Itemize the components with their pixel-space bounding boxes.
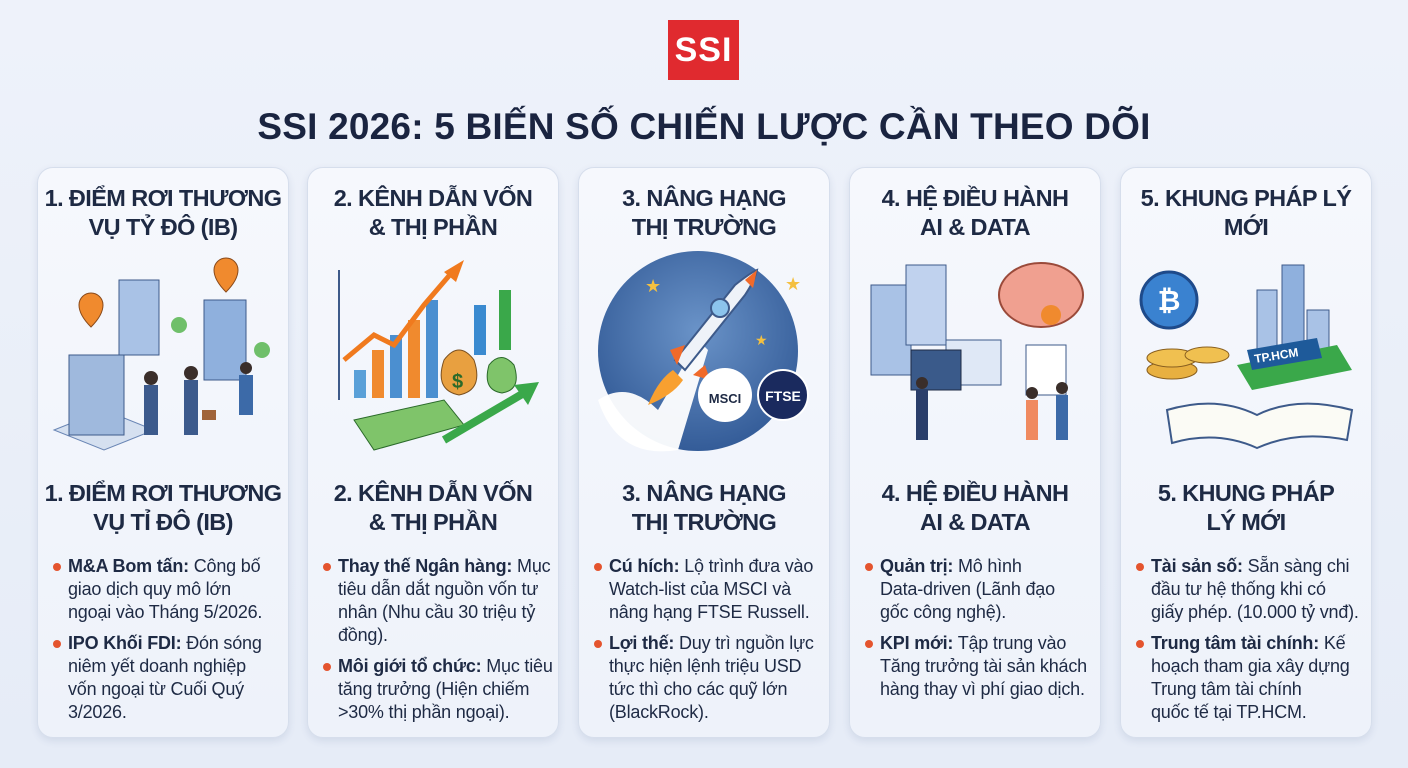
illustration: rocket: ★: [755, 332, 768, 348]
bullets card 1: [53, 556, 262, 722]
heading card 3 repeat: THỊ TRƯỜNG: [632, 509, 776, 535]
heading card 2: 2. KÊNH DẪN VỐN: [334, 185, 532, 211]
illustration: rocket: FTSE: [765, 388, 801, 404]
panel: card 5: [1120, 167, 1372, 738]
heading card 4 repeat: AI & DATA: [920, 509, 1030, 535]
bullets card 5: Trung tâm tài chính: Kế: [1151, 633, 1345, 653]
heading card 4: [882, 185, 1068, 240]
heading card 1 repeat: VỤ TỈ ĐÔ (IB): [93, 509, 233, 535]
heading card 2 repeat: [334, 480, 532, 535]
illustration: bitcoin, coins, city, book: TP.HCM: [1253, 345, 1299, 366]
bullets card 4: Quản trị: Mô hình: [880, 556, 1022, 576]
illustration: bitcoin, coins, city, book: [1140, 264, 1354, 450]
bullets card 3: [594, 556, 814, 722]
panel: card 1: [37, 167, 289, 738]
logo: [668, 20, 739, 80]
heading card 1 repeat: [45, 480, 281, 535]
bullets card 2: tiêu dẫn dắt nguồn vốn tư: [338, 579, 538, 599]
heading card 4: AI & DATA: [920, 214, 1030, 240]
bullets card 2: [323, 556, 553, 722]
panel: card 4: [849, 167, 1101, 738]
bullets card 1: M&A Bom tấn: Công bố: [68, 556, 260, 576]
heading card 3: [622, 185, 786, 240]
bullets card 4: Data-driven (Lãnh đạo: [880, 579, 1055, 599]
illustration: chart and money: [338, 260, 539, 451]
heading card 3: THỊ TRƯỜNG: [632, 214, 776, 240]
bullets card 3: Lợi thế: Duy trì nguồn lực: [609, 633, 814, 653]
bullets card 1: IPO Khối FDI: Đón sóng: [68, 633, 262, 653]
illustration: rocket: MSCI: [709, 391, 741, 406]
bullets card 4: Tăng trưởng tài sản khách: [880, 656, 1087, 676]
bullets card 4: KPI mới: Tập trung vào: [880, 633, 1066, 653]
illustration: rocket: ★: [645, 276, 661, 296]
heading card 3: 3. NÂNG HẠNG: [622, 185, 786, 211]
bullets card 3: Watch-list của MSCI và: [609, 579, 791, 599]
heading card 4 repeat: 4. HỆ ĐIỀU HÀNH: [882, 480, 1068, 506]
heading card 5 repeat: [1158, 480, 1334, 535]
bullets card 5: [1136, 556, 1359, 722]
logo: SSI: [675, 31, 732, 69]
bullets card 5: Trung tâm tài chính: [1151, 679, 1302, 699]
heading card 2 repeat: & THỊ PHẦN: [369, 509, 497, 535]
bullets card 3: tức thì cho các quỹ lớn: [609, 679, 787, 699]
heading card 2: [334, 185, 532, 240]
bullets card 2: đồng).: [338, 625, 388, 645]
heading card 4 repeat: [882, 480, 1068, 535]
bullets card 1: ngoại vào Tháng 5/2026.: [68, 602, 262, 622]
bullets card 5: hoạch tham gia xây dựng: [1151, 656, 1350, 676]
bullets card 2: >30% thị phần ngoại).: [338, 702, 509, 722]
bullets card 1: 3/2026.: [68, 702, 127, 722]
panel: card 2: [307, 167, 559, 738]
bullets card 3: (BlackRock).: [609, 702, 709, 722]
bullets card 2: Môi giới tổ chức: Mục tiêu: [338, 656, 553, 676]
bullets card 2: tăng trưởng (Hiện chiếm: [338, 679, 529, 699]
panel: card 3: [578, 167, 830, 738]
bullets card 5: quốc tế tại TP.HCM.: [1151, 702, 1307, 722]
heading card 1: [45, 185, 281, 240]
bullets card 5: đầu tư hệ thống khi có: [1151, 579, 1326, 599]
heading card 5: MỚI: [1224, 214, 1268, 240]
heading card 5 repeat: 5. KHUNG PHÁP: [1158, 480, 1334, 506]
bullets card 2: Thay thế Ngân hàng: Mục: [338, 556, 550, 576]
bullets card 1: niêm yết doanh nghiệp: [68, 656, 246, 676]
heading card 5: 5. KHUNG PHÁP LÝ: [1141, 185, 1351, 211]
illustration: rocket: [598, 251, 809, 452]
heading card 1: VỤ TỶ ĐÔ (IB): [89, 214, 237, 240]
heading card 1: 1. ĐIỂM RƠI THƯƠNG: [45, 185, 281, 211]
illustration: bitcoin, coins, city, book: ₿: [1158, 285, 1180, 316]
title: SSI 2026: 5 BIẾN SỐ CHIẾN LƯỢC CẦN THEO DÕI: [257, 106, 1151, 147]
bullets card 3: thực hiện lệnh triệu USD: [609, 656, 801, 676]
illustration: servers and brain: [870, 262, 1084, 440]
bullets card 1: giao dịch quy mô lớn: [68, 579, 231, 599]
illustration: rocket: ★: [785, 274, 801, 294]
heading card 3 repeat: 3. NÂNG HẠNG: [622, 480, 786, 506]
bullets card 3: Cú hích: Lộ trình đưa vào: [609, 556, 813, 576]
bullets card 4: gốc công nghệ).: [880, 602, 1006, 622]
heading card 1 repeat: 1. ĐIỂM RƠI THƯƠNG: [45, 480, 281, 506]
bullets card 4: [865, 556, 1087, 699]
heading card 2: & THỊ PHẦN: [369, 214, 497, 240]
heading card 2 repeat: 2. KÊNH DẪN VỐN: [334, 480, 532, 506]
bullets card 5: giấy phép. (10.000 tỷ vnđ).: [1151, 602, 1359, 622]
heading card 5: [1141, 185, 1352, 240]
bullets card 4: hàng thay vì phí giao dịch.: [880, 679, 1085, 699]
bullets card 3: nâng hạng FTSE Russell.: [609, 602, 810, 622]
heading card 3 repeat: [622, 480, 786, 535]
bullets card 2: nhân (Nhu cầu 30 triệu tỷ: [338, 602, 535, 622]
illustration: chart and money: $: [452, 371, 463, 393]
heading card 4: 4. HỆ ĐIỀU HÀNH: [882, 185, 1068, 211]
heading card 5 repeat: LÝ MỚI: [1206, 509, 1286, 535]
bullets card 1: vốn ngoại từ Cuối Quý: [68, 679, 244, 699]
illustration: buildings and handshake: [52, 258, 270, 450]
bullets card 5: Tài sản số: Sẵn sàng chi: [1151, 556, 1349, 576]
